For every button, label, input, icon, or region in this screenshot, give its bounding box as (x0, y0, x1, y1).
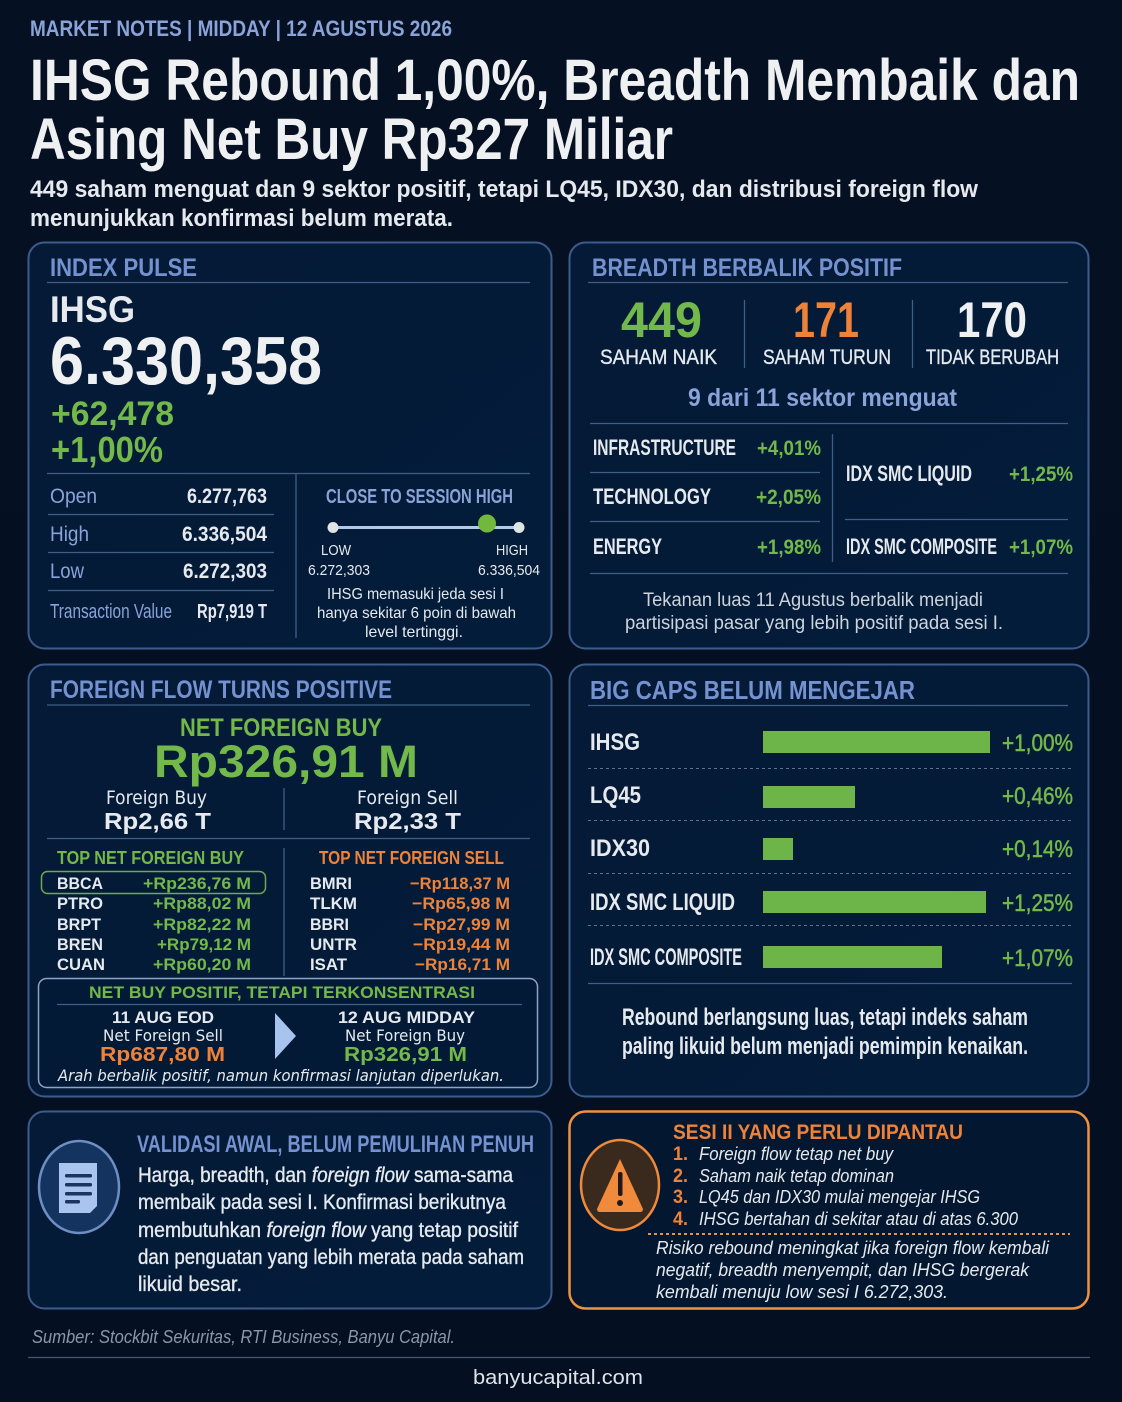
index name: IHSG (50, 289, 135, 330)
bar: IHSG: IHSG (590, 729, 640, 756)
icon: warning (581, 1140, 659, 1230)
risk note (656, 1238, 1050, 1302)
risk note: kembali menuju low sesi I 6.272,303. (656, 1282, 948, 1302)
bar chart (588, 729, 1073, 972)
stat: saham naik: SAHAM NAIK (600, 346, 717, 369)
table: top net foreign sell: −Rp118,37 M (410, 874, 510, 893)
bar: IDX SMC Composite (590, 944, 1073, 972)
stats table (48, 485, 274, 623)
before: 11 Aug: Net Foreign Sell (103, 1026, 223, 1045)
table: top net foreign buy: TOP NET FOREIGN BUY (57, 848, 244, 868)
table: top net foreign buy: BRPT (57, 915, 102, 934)
validation body: membaik pada sesi I. Konfirmasi berikutnya (138, 1191, 506, 1214)
range note (317, 586, 516, 641)
bar: IDX SMC Composite: +1,07% (1002, 945, 1073, 972)
range end labels (308, 542, 540, 579)
stats table: Low (50, 560, 85, 583)
risk note: negatif, breadth menyempit, dan IHSG bergerak (656, 1260, 1030, 1280)
arrow (275, 1013, 296, 1059)
foreign sell total: Rp2,33 T (354, 808, 461, 834)
watchlist items: 3. (673, 1187, 688, 1208)
table: top net foreign sell: −Rp27,99 M (413, 915, 510, 934)
table: top net foreign buy: PTRO (57, 894, 103, 913)
heading: big caps: BIG CAPS BELUM MENGEJAR (590, 675, 915, 705)
watchlist items: IHSG bertahan di sekitar atau di atas 6.300 (699, 1209, 1018, 1229)
net foreign buy label: NET FOREIGN BUY (180, 714, 382, 742)
heading: index pulse: INDEX PULSE (50, 254, 197, 282)
stats table: 6.336,504 (182, 523, 267, 546)
bar: IDX SMC Liquid: +1,25% (1002, 890, 1073, 917)
range end labels: 6.272,303 (308, 562, 370, 579)
risk note: Risiko rebound meningkat jika foreign flow kembali (656, 1238, 1050, 1258)
bar: LQ45 (590, 782, 1073, 810)
watchlist items: LQ45 dan IDX30 mulai mengejar IHSG (699, 1187, 980, 1207)
stats table: Transaction Value (50, 601, 172, 623)
after: 12 Aug: Rp326,91 M (344, 1044, 467, 1066)
bar: LQ45: LQ45 (590, 782, 641, 809)
validation body (138, 1164, 524, 1296)
after: 12 Aug (338, 1008, 476, 1066)
table: top net foreign buy: BREN (57, 935, 103, 954)
table: top net foreign sell: TOP NET FOREIGN SELL (319, 848, 504, 868)
sector list left (590, 435, 821, 559)
range end labels: 6.336,504 (478, 562, 540, 579)
sector list right (845, 461, 1073, 559)
heading: foreign flow: FOREIGN FLOW TURNS POSITIVE (50, 676, 392, 704)
sector list left: +4,01% (757, 437, 821, 460)
table: top net foreign sell (310, 848, 510, 974)
stat: tidak berubah: TIDAK BERUBAH (926, 346, 1059, 369)
panel: foreign flow (28, 664, 552, 1096)
stat: tidak berubah (926, 292, 1059, 369)
bar: IDX30: +0,14% (1002, 836, 1073, 863)
bar: IHSG (590, 729, 1073, 757)
title (30, 48, 1080, 172)
icon: document (39, 1141, 119, 1233)
bar: IDX SMC Liquid (590, 889, 1073, 917)
table: top net foreign sell: −Rp16,71 M (415, 955, 510, 974)
subtitle (30, 176, 978, 232)
table: top net foreign sell: ISAT (310, 955, 348, 974)
foreign buy total: Rp2,66 T (104, 808, 211, 834)
range end labels: LOW (321, 542, 352, 559)
table: top net foreign sell: −Rp65,98 M (412, 894, 510, 913)
bar: IDX30: IDX30 (590, 835, 650, 862)
watchlist items: 4. (673, 1209, 688, 1230)
watchlist items: Foreign flow tetap net buy (699, 1144, 894, 1164)
sector list left: +2,05% (756, 486, 821, 509)
table: top net foreign sell: TLKM (310, 894, 357, 913)
callout heading: NET BUY POSITIF, TETAPI TERKONSENTRASI (89, 983, 475, 1002)
subtitle: menunjukkan konfirmasi belum merata. (30, 205, 453, 232)
foreign sell total: Foreign Sell (357, 787, 458, 809)
stats table: 6.272,303 (183, 560, 267, 583)
panel: early validation (28, 1112, 552, 1308)
bar: IHSG: +1,00% (1002, 730, 1073, 757)
table: top net foreign sell: −Rp19,44 M (413, 935, 510, 954)
footer website: banyucapital.com (473, 1367, 643, 1389)
bar: IDX30 (590, 835, 1073, 863)
heading: early validation: VALIDASI AWAL, BELUM PEMULIHAN PENUH (137, 1131, 534, 1158)
stat: saham turun (763, 292, 891, 369)
validation body: dan penguatan yang lebih merata pada saham (138, 1246, 524, 1269)
table: top net foreign sell: BBRI (310, 915, 349, 934)
sector list left: INFRASTRUCTURE (593, 435, 736, 460)
stat: saham naik: 449 (621, 292, 702, 348)
sector list left: TECHNOLOGY (593, 484, 711, 509)
range note: hanya sekitar 6 poin di bawah (317, 605, 516, 622)
callout: concentrated net buy (38, 978, 538, 1088)
stat: saham turun: SAHAM TURUN (763, 346, 891, 369)
validation body: membutuhkan foreign flow yang tetap positif (138, 1219, 518, 1242)
panel: breadth (570, 242, 1088, 648)
table: top net foreign buy: BBCA (57, 874, 103, 893)
panel: index pulse (28, 242, 552, 648)
net foreign buy value: Rp326,91 M (154, 736, 418, 787)
stats table: Open (50, 485, 97, 508)
stat: saham turun: 171 (793, 292, 859, 348)
validation body: likuid besar. (138, 1273, 242, 1296)
foreign buy total (104, 787, 211, 834)
breadth note (625, 590, 1003, 634)
range slider (328, 514, 524, 533)
panel: session II watchlist (570, 1112, 1088, 1308)
table: top net foreign sell: BMRI (310, 874, 352, 893)
subtitle: 449 saham menguat dan 9 sektor positif, tetapi LQ45, IDX30, dan distribusi foreign flow (30, 176, 978, 203)
stats table: High (50, 523, 89, 546)
table: top net foreign buy: +Rp60,20 M (153, 955, 251, 974)
bar: IDX SMC Composite: IDX SMC COMPOSITE (590, 944, 742, 971)
watchlist items: 2. (673, 1166, 688, 1187)
validation body: Harga, breadth, dan foreign flow sama-sama (138, 1164, 513, 1187)
heading: session II watchlist: SESI II YANG PERLU DIPANTAU (673, 1121, 963, 1144)
callout note: Arah berbalik positif, namun konfirmasi lanjutan diperlukan. (57, 1066, 504, 1085)
stat: tidak berubah: 170 (957, 292, 1027, 348)
title: Asing Net Buy Rp327 Miliar (30, 107, 673, 172)
bar: IDX SMC Liquid: IDX SMC LIQUID (590, 889, 735, 916)
sector list right: IDX SMC LIQUID (846, 461, 972, 486)
stats table: 6.277,763 (187, 485, 267, 508)
point change: +62,478 (51, 395, 174, 433)
big caps note (622, 1004, 1028, 1060)
before: 11 Aug: 11 AUG EOD (112, 1008, 214, 1027)
table: top net foreign buy: +Rp88,02 M (153, 894, 251, 913)
breadth note: Tekanan luas 11 Agustus berbalik menjadi (643, 590, 983, 611)
table: top net foreign sell: UNTR (310, 935, 357, 954)
range end labels: HIGH (496, 542, 528, 559)
table: top net foreign buy: +Rp236,76 M (143, 874, 251, 893)
stat: saham naik (600, 292, 717, 369)
sector list left: +1,98% (757, 536, 821, 559)
watchlist items (673, 1144, 1018, 1230)
kicker: MARKET NOTES | MIDDAY | 12 AGUSTUS 2026 (30, 16, 452, 41)
sector list right: +1,07% (1009, 536, 1073, 559)
table: top net foreign buy (42, 848, 266, 974)
sector list left: ENERGY (593, 534, 662, 559)
sector list right: IDX SMC COMPOSITE (846, 534, 997, 559)
range label: CLOSE TO SESSION HIGH (326, 486, 513, 508)
before: 11 Aug: Rp687,80 M (100, 1044, 225, 1066)
index value: 6.330,358 (50, 323, 322, 399)
breadth note: partisipasi pasar yang lebih positif pada sesi I. (625, 613, 1003, 634)
heading: breadth: BREADTH BERBALIK POSITIF (592, 254, 902, 282)
table: top net foreign buy: +Rp82,22 M (153, 915, 251, 934)
sector summary: 9 dari 11 sektor menguat (688, 384, 958, 412)
before: 11 Aug (100, 1008, 225, 1066)
sector list right: +1,25% (1009, 463, 1073, 486)
range note: IHSG memasuki jeda sesi I (327, 586, 504, 603)
foreign sell total (354, 787, 461, 834)
panel: big caps (570, 664, 1088, 1096)
range note: level tertinggi. (365, 624, 463, 641)
table: top net foreign buy: +Rp79,12 M (157, 935, 251, 954)
bar: LQ45: +0,46% (1002, 783, 1073, 810)
after: 12 Aug: 12 AUG MIDDAY (338, 1008, 476, 1027)
percent change: +1,00% (51, 429, 163, 470)
foreign buy total: Foreign Buy (106, 787, 207, 809)
watchlist items: 1. (673, 1144, 688, 1165)
source note: Sumber: Stockbit Sekuritas, RTI Business, Banyu Capital. (32, 1327, 455, 1347)
stats table: Rp7,919 T (197, 601, 267, 623)
after: 12 Aug: Net Foreign Buy (345, 1026, 465, 1045)
table: top net foreign buy: CUAN (57, 955, 105, 974)
watchlist items: Saham naik tetap dominan (699, 1166, 894, 1186)
